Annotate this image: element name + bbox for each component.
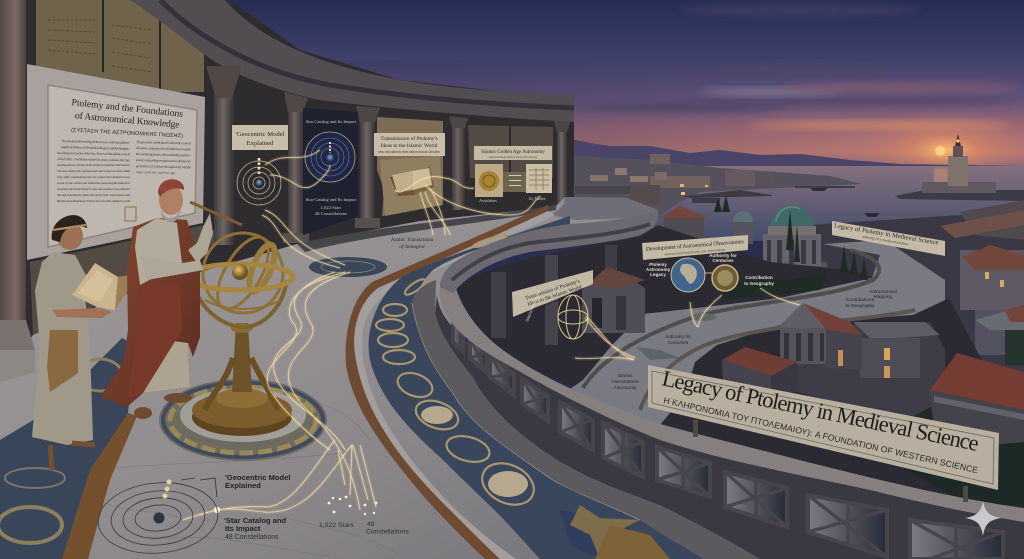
lower terrace labels: Astronomy: [614, 385, 637, 391]
lower terrace labels: Centuries: [668, 340, 689, 346]
front temple building: [778, 303, 945, 420]
sign: transmission of Ptolemy's ideas, lower level: Transmission of Ptolemy's: [524, 277, 581, 302]
plaque seal: [125, 207, 136, 221]
plaque body text: forty eight constellations and was copied and translated across: [57, 175, 131, 179]
terrace surface end: [550, 197, 658, 220]
sign: transmission of Ptolemy's ideas: [374, 133, 445, 156]
cornice: [130, 0, 574, 122]
mosaic band with scroll pattern: [369, 216, 703, 559]
student sash: [47, 330, 78, 392]
right red-roof building: [930, 353, 1024, 450]
balustrade lattice panels: [453, 323, 1003, 559]
lighthouse of Alexandria: [895, 134, 1024, 201]
sign: geocentric model explained: [232, 125, 288, 150]
glowing light streams: [183, 150, 540, 520]
plaque body text: The astronomical knowledge of the ancient world was gathered: [61, 139, 129, 145]
large marble column at left: [0, 0, 35, 382]
floor labels: 48: [367, 521, 375, 528]
lower colonnade temple: [491, 245, 645, 345]
white labels around the globe: Ptolemy: [649, 262, 667, 267]
panel: Islamic Golden Age astronomy: Islamic Golden Age Astronomy: [481, 150, 545, 155]
plaque body text: libraries from Baghdad to Toledo and across the medieval world: [57, 199, 130, 203]
plaque body text: describing the motions of the Sun, Moon and the planets around: [57, 151, 130, 157]
inscribed tablets above plaque: [36, 0, 204, 92]
lower wall below plaque: [30, 225, 225, 335]
white labels around the globe: Contribution: [745, 275, 773, 280]
sign: transmission of Ptolemy's ideas: Ideas to the Islamic World: [381, 143, 438, 149]
upper tunic: [135, 218, 182, 285]
head: [158, 179, 184, 222]
upper curb of terrace with frieze: [440, 210, 658, 293]
panel: star catalog wall: Star Catalog and Its Impact: [306, 197, 357, 202]
open book held by student: [72, 263, 140, 310]
armillary stand: [192, 323, 292, 436]
plaque body text: and shaped how scholars in the medieval world saw the heavens: [57, 163, 131, 167]
sign: development of astronomical observatories: [642, 235, 748, 260]
panel: star catalog wall: [303, 108, 358, 235]
floor labels: 'Star Catalog and: [224, 516, 287, 525]
sign: development of astronomical observatories: astronomical instruments and observations: [665, 248, 726, 256]
student head: [52, 215, 87, 250]
sign: legacy of Ptolemy, small: authority of a medieval tradition: [862, 235, 909, 246]
geocentric rings on wall: [237, 158, 281, 205]
lower armillary diagram: Islamic Astronomy: [524, 288, 542, 322]
distant city on the left shore: [566, 154, 880, 217]
sign: main legacy banner: [648, 365, 999, 502]
floor orbit diagram: [95, 478, 221, 558]
floor text: Arabic translations: of Almagest: [399, 243, 425, 250]
student legs and sandals: [50, 443, 95, 470]
white labels around the globe: Centuries: [712, 258, 734, 263]
sign: transmission of Ptolemy's ideas, lower level: translations and astronomical scholars: [532, 291, 580, 310]
sign: transmission of Ptolemy's ideas: new translations from astronomical scholars: [378, 150, 440, 154]
brown inlay strip: [346, 205, 548, 559]
floor marble veining: [95, 390, 400, 556]
cloak: [100, 218, 200, 407]
cypress trees and garden: [720, 210, 935, 430]
papyrus panel: [377, 117, 553, 216]
white labels around the globe: Astronomy: [646, 267, 671, 272]
sighting rod: [190, 202, 242, 225]
sign: transmission of Ptolemy's ideas, lower level: [512, 270, 593, 317]
arm reaching to sphere: [140, 256, 203, 280]
white labels around the globe: [646, 253, 774, 286]
armillary base mosaic: [159, 379, 327, 461]
feet: [134, 393, 192, 419]
balustrade body: [435, 295, 1024, 559]
lower terrace light streams: [575, 288, 800, 360]
floor text: Arabic translations: [391, 237, 433, 250]
plaque body text: geometry and observation for later astronomers who refined it: [57, 187, 130, 191]
plaque body text: generations of scholars throughout the Middle: [136, 164, 192, 169]
sign: main legacy banner: Legacy of Ptolemy in Medieval Science: [660, 365, 981, 456]
lower terrace labels: [611, 289, 897, 391]
Ptolemy figure: [100, 179, 242, 419]
floor labels: 48 Constellations: [225, 534, 279, 541]
lower terrace labels: to Geography: [845, 303, 875, 309]
plaque body text: through instruments, tables and newly built observatories and: [57, 193, 130, 198]
panel: Islamic Golden Age astronomy: Zij Tables: [529, 196, 546, 201]
under tunic: [143, 340, 190, 393]
sign: geocentric model explained: 'Geocentric Model: [236, 131, 285, 138]
plaque body text: The geocentric model placed Earth at the centre of: [136, 140, 192, 145]
colonnade rear wall: [0, 0, 574, 335]
harbour water: [566, 166, 1024, 241]
armillary rings: [193, 229, 287, 327]
domed rotunda: [752, 205, 830, 274]
plaque body text: all motion, using epicycles and deferents to explain: [136, 146, 191, 152]
student tunic: [32, 252, 93, 445]
floor labels: Its Impact: [225, 524, 261, 533]
student figure: [32, 215, 112, 470]
lower court interior: [453, 225, 1024, 525]
sign: legacy of Ptolemy, small: Legacy of Ptolemy in Medieval Science: [834, 222, 939, 247]
armillary sphere: [187, 229, 293, 436]
lower armillary diagram: [524, 288, 588, 339]
sign: geocentric model explained: Explained: [247, 140, 274, 147]
lower terrace labels: Authority for: [665, 334, 691, 340]
floor labels: Constellations: [366, 528, 409, 536]
star sparkles on the floor: [214, 496, 377, 515]
balustrade rail cap: [440, 253, 1024, 522]
student arm: [52, 308, 112, 318]
sign: legacy of Ptolemy, small: [832, 221, 945, 256]
lower terrace labels: Astronomers: [611, 379, 639, 385]
small red-roof pavilion: [722, 347, 797, 405]
plaque body text: [57, 139, 192, 203]
banner posts: [693, 420, 968, 502]
plaque body text: The star catalog lists one thousand and twenty two stars within: [57, 169, 130, 173]
lower terrace labels: Mapping: [874, 294, 893, 300]
plaque body text: Greek, Syriac, Arabic and Latin texts, preserving his method of: [57, 181, 131, 186]
plaque title text: (ΣΥΣΤΑΣΗ ΤΗΣ ΑΣΤΡΟΝΟΜΙΚΗΣ ΓΝΩΣΗΣ): [71, 128, 183, 139]
lower terrace labels: Islamic: [618, 373, 633, 379]
lower terrace labels: Contributions: [846, 297, 875, 303]
wall columns: [206, 66, 570, 245]
right-hand city buildings: [780, 200, 1024, 440]
plaque body text: a fixed Earth, a model that endured for many centuries after him: [57, 157, 130, 163]
floor labels: 1,022 Stars: [319, 522, 354, 529]
panel: star catalog wall: 1,022 Stars: [321, 205, 342, 211]
title plaque: [27, 64, 205, 260]
plaque title text: of Astronomical Knowledge: [74, 110, 180, 131]
panel: Islamic Golden Age astronomy: Astrolabes: [479, 198, 497, 203]
dark foliage at bottom right: [880, 442, 1024, 510]
panel: star catalog wall: 48 Constellations: [315, 211, 347, 216]
plaque body text: together by Ptolemy of Alexandria in his great work the Almagest: [61, 145, 129, 151]
white labels around the globe: Legacy: [650, 272, 666, 277]
floor text: Arabic translations: Arabic Translations: [391, 237, 433, 243]
floor labels: 'Geocentric Model: [225, 473, 291, 482]
open book on the wall: [390, 167, 434, 196]
lower terrace floor: [560, 240, 945, 425]
curved walkway beside balustrade: [412, 280, 790, 559]
sparkle mark: [965, 501, 1001, 536]
plaque title text: Ptolemy and the Foundations: [71, 97, 184, 120]
floor mosaic at bottom left: [0, 338, 137, 559]
distant hills: [566, 138, 1024, 172]
stone curb: [354, 211, 555, 559]
raised arm: [188, 213, 213, 263]
plaque body text: Ages until the modern age.: [136, 170, 176, 175]
sign: development of astronomical observatories: Development of Astronomical Observatories: [646, 238, 745, 253]
draped cloak front: [127, 283, 182, 400]
floor labels: [224, 473, 409, 541]
sign: main legacy banner: Η ΚΛΗΡΟΝΟΜΙΑ ΤΟΥ ΠΤΟΛΕΜΑΙΟΥ): A FOUNDATION OF WESTERN SCIENCE: [663, 395, 979, 475]
back buildings on the terrace: [660, 195, 753, 244]
panel: Islamic Golden Age astronomy: [474, 146, 552, 203]
panel: Islamic Golden Age astronomy: astronomical tables and instruments: [489, 155, 538, 159]
plaque body text: power, and guiding navigation and calendars for: [136, 158, 192, 164]
plaque title text: [71, 97, 184, 139]
sign: transmission of Ptolemy's ideas: Transmission of Ptolemy's: [380, 135, 438, 142]
main marble terrace floor: [0, 197, 658, 559]
white labels around the globe: Authority for: [709, 253, 737, 258]
sky at dusk: [0, 0, 1024, 192]
far floor mosaic band: [297, 205, 556, 252]
floor labels: Explained: [225, 481, 261, 490]
lower terrace labels: Astronomical: [869, 289, 897, 295]
floor disc: [309, 257, 387, 277]
globe and coin: [671, 258, 738, 292]
white labels around the globe: to Geography: [744, 281, 774, 286]
panel: star catalog wall: Star Catalog and Its Impact: [306, 119, 357, 124]
plaque body text: the wandering planets with remarkable predictive: [136, 152, 192, 157]
sign: transmission of Ptolemy's ideas, lower level: Ideas to the Islamic World: [527, 284, 583, 308]
